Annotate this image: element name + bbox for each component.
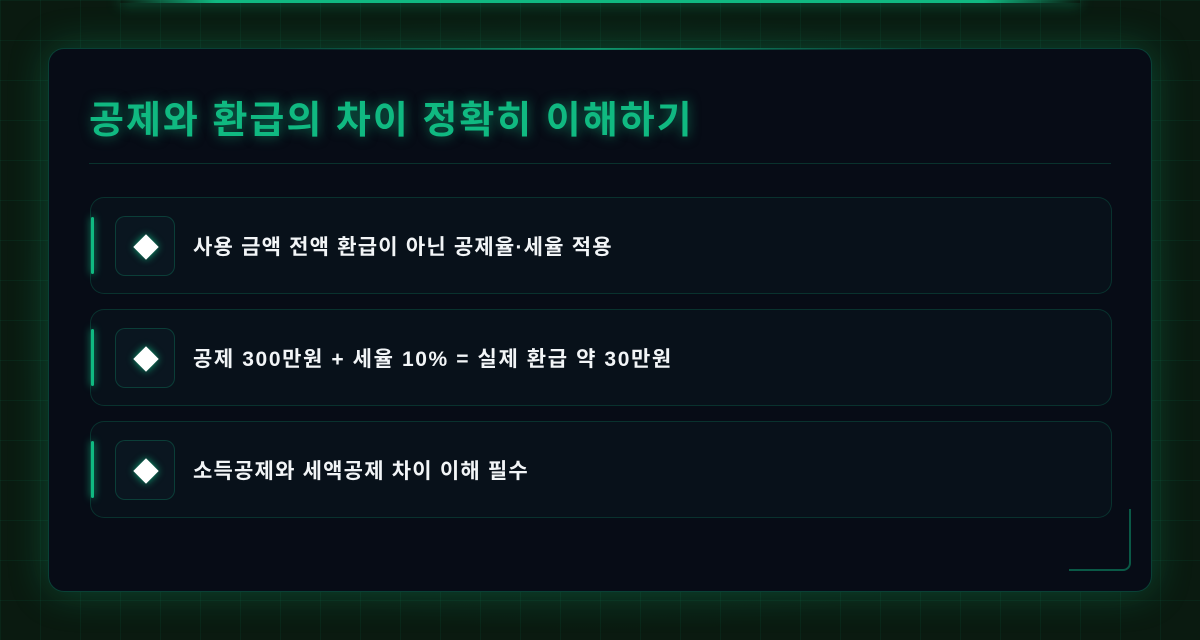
item 3 <box>90 421 1112 518</box>
text 2: 공제 300만원 + 세율 10% = 실제 환급 약 30만원 <box>193 348 673 371</box>
icon: diamond <box>115 440 175 500</box>
icon: diamond <box>115 328 175 388</box>
icon: diamond <box>115 216 175 276</box>
item 2 <box>90 309 1112 406</box>
title: 공제와 환급의 차이 정확히 이해하기 <box>89 100 694 142</box>
text 1: 사용 금액 전액 환급이 아닌 공제율·세율 적용 <box>193 236 613 259</box>
panel: main card <box>48 48 1152 592</box>
item 1 <box>90 197 1112 294</box>
text 3: 소득공제와 세액공제 차이 이해 필수 <box>193 460 529 483</box>
